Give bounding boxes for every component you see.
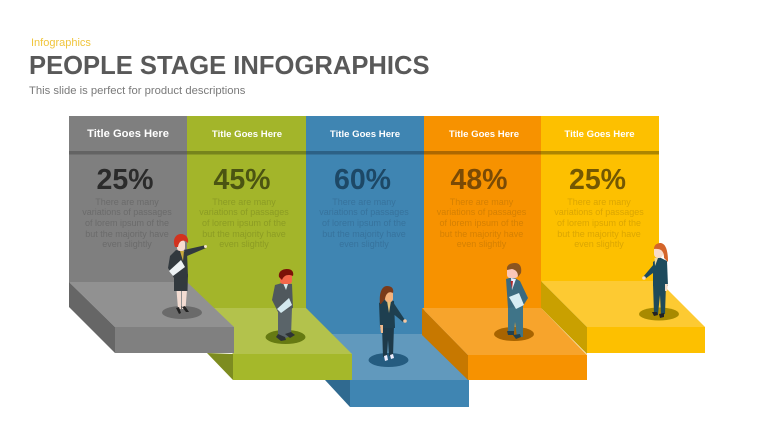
description <box>554 196 644 249</box>
heading: Title Goes Here <box>330 128 400 140</box>
heading: Title Goes Here <box>564 128 635 140</box>
column 1 text <box>82 128 172 249</box>
percentage: 60% <box>334 164 391 196</box>
description: There are many <box>567 196 631 206</box>
description: but the majority have <box>202 229 286 239</box>
description: There are many <box>95 196 159 206</box>
description: of lorem ipsum of the <box>439 218 524 228</box>
description: There are many <box>450 196 513 206</box>
heading: Title Goes Here <box>87 128 169 140</box>
description: but the majority have <box>440 229 523 239</box>
platform: blue <box>306 334 469 407</box>
eyebrow label: Infographics <box>31 36 91 48</box>
description <box>319 196 409 249</box>
column 2 text <box>199 128 289 249</box>
panel: gray column wall <box>69 116 188 283</box>
platform: gray <box>69 282 234 353</box>
header divider bars <box>69 151 659 154</box>
description: variations of passages <box>82 207 172 217</box>
person: man with folder on orange platform <box>494 263 534 341</box>
panel: blue column wall <box>306 116 424 335</box>
title: PEOPLE STAGE INFOGRAPHICS <box>29 52 430 80</box>
description: variations of passages <box>554 207 644 217</box>
subtitle: This slide is perfect for product descriptions <box>29 84 245 96</box>
description: of lorem ipsum of the <box>557 218 641 228</box>
column 3 text <box>319 128 409 249</box>
description: There are many <box>332 196 396 206</box>
description: variations of passages <box>319 207 409 217</box>
panel: yellow column wall <box>541 116 659 282</box>
description: but the majority have <box>85 229 169 239</box>
description: variations of passages <box>199 207 289 217</box>
description: There are many <box>212 196 276 206</box>
panel: orange column wall <box>424 116 542 309</box>
description: even slightly <box>219 239 269 249</box>
platform: green <box>187 308 352 380</box>
description: variations of passages <box>437 207 526 217</box>
person: man with folder on green platform <box>266 269 306 344</box>
panel: green column wall <box>187 116 306 309</box>
platform: orange <box>422 308 587 380</box>
description: even slightly <box>457 239 506 249</box>
heading: Title Goes Here <box>449 128 519 140</box>
description: of lorem ipsum of the <box>322 218 406 228</box>
person: brown-haired woman on blue platform <box>368 286 408 367</box>
percentage: 25% <box>569 164 626 196</box>
description <box>199 196 289 249</box>
percentage: 25% <box>96 164 154 196</box>
column 5 text <box>554 128 644 249</box>
person: auburn-haired woman on yellow platform <box>639 243 679 320</box>
description <box>82 196 172 249</box>
description: of lorem ipsum of the <box>202 218 286 228</box>
description: but the majority have <box>557 229 641 239</box>
description: even slightly <box>574 239 624 249</box>
percentage: 48% <box>450 164 508 196</box>
description: but the majority have <box>322 229 406 239</box>
heading: Title Goes Here <box>212 128 282 140</box>
description <box>436 196 526 249</box>
description: of lorem ipsum of the <box>85 218 169 228</box>
description: even slightly <box>339 239 389 249</box>
person: red-haired woman pointing <box>162 234 207 319</box>
column 4 text <box>436 128 526 249</box>
platform: yellow <box>541 281 705 354</box>
description: even slightly <box>102 239 152 249</box>
percentage: 45% <box>213 164 271 196</box>
